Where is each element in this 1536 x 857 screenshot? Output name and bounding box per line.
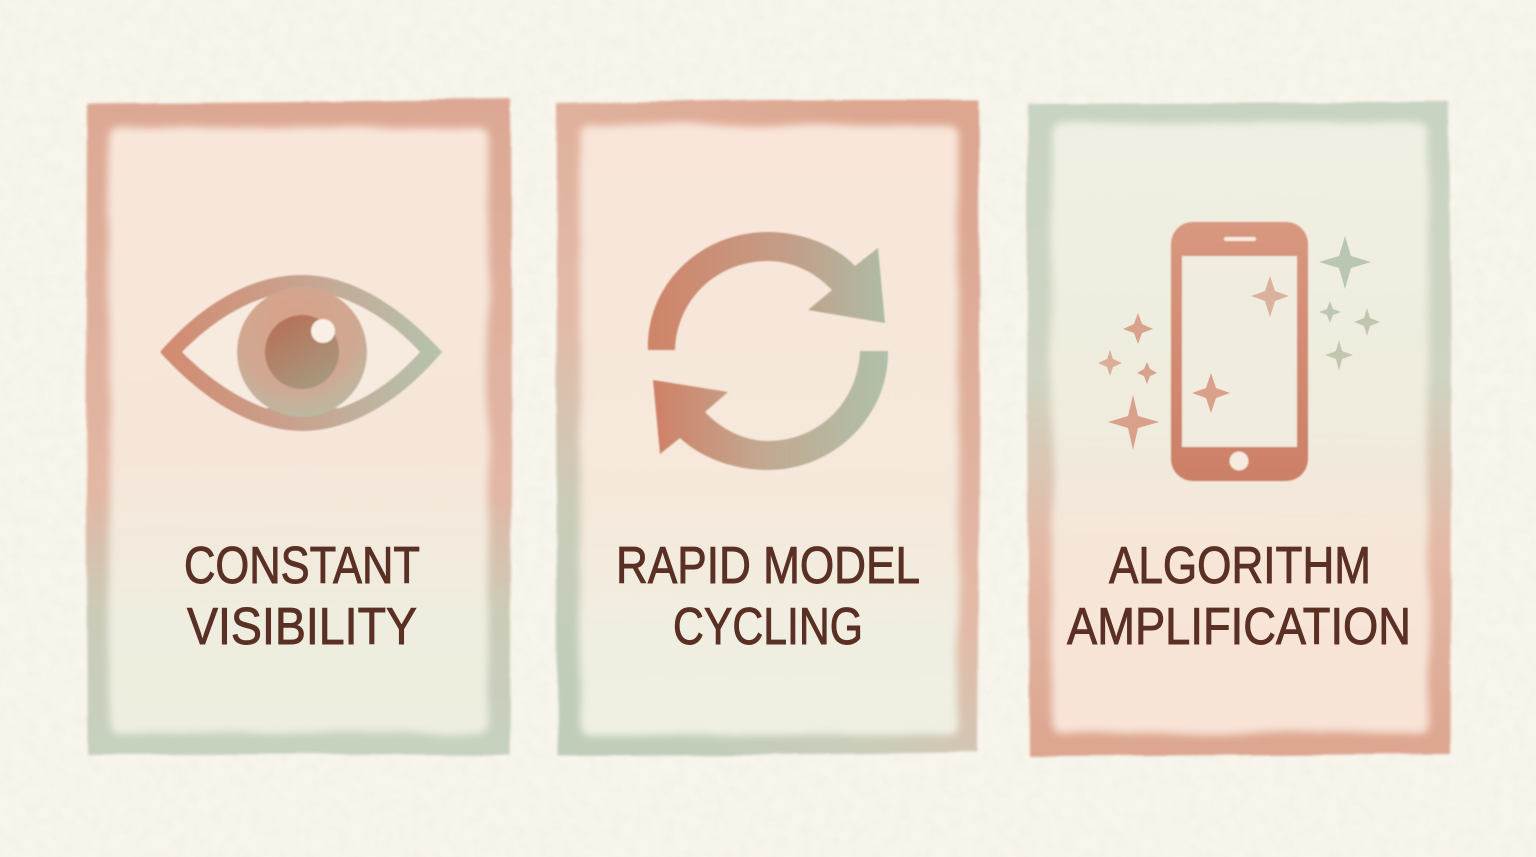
- icon: sparkles: [1098, 236, 1380, 450]
- panel: rapid model cycling: [556, 100, 980, 756]
- panel: constant visibility: [86, 99, 512, 755]
- label: algorithm amplification: [1067, 537, 1411, 656]
- icon: cycle arrows: [648, 232, 888, 470]
- label: constant visibility: VISIBILITY: [187, 598, 417, 656]
- label: rapid model cycling: CYCLING: [673, 598, 863, 656]
- label: rapid model cycling: RAPID MODEL: [616, 537, 920, 595]
- label: algorithm amplification: ALGORITHM: [1109, 537, 1371, 595]
- icon: eye: [160, 275, 442, 431]
- label: constant visibility: CONSTANT: [184, 537, 420, 595]
- label: rapid model cycling: [616, 537, 920, 656]
- label: algorithm amplification: AMPLIFICATION: [1067, 598, 1411, 656]
- icon: smartphone: [1171, 222, 1308, 481]
- panel: algorithm amplification: [1027, 102, 1451, 756]
- label: constant visibility: [184, 537, 420, 656]
